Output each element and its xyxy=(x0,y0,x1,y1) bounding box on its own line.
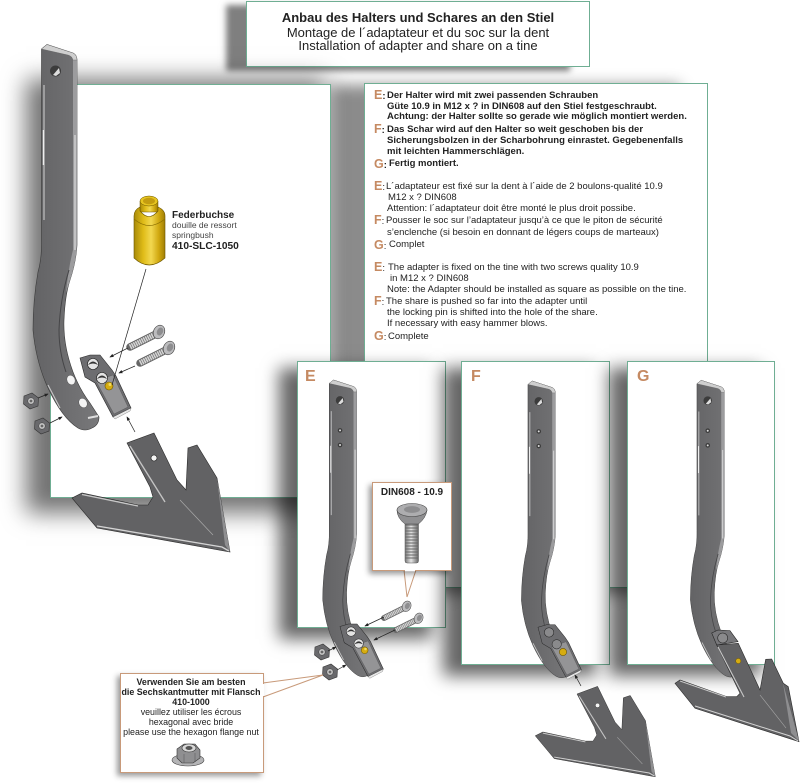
callout text: Verwenden Sie am besten xyxy=(136,677,246,687)
panel: step G xyxy=(627,361,775,665)
callout: flange nut advice xyxy=(120,674,323,772)
label: step E: E xyxy=(305,368,316,385)
instructions in German: Das Schar wird auf den Halter so weit geschoben bis der xyxy=(387,124,643,135)
panel: instructions text background xyxy=(364,83,708,588)
tine xyxy=(33,44,99,430)
bush label: douille de ressort xyxy=(172,220,237,230)
instructions in French: E: xyxy=(374,179,385,193)
title: Anbau des Halters und Schares an den Stiel xyxy=(282,10,554,25)
label: step G: G xyxy=(637,368,649,385)
step F arrow xyxy=(575,675,581,686)
instructions in French: M12 x ? DIN608 xyxy=(388,192,457,203)
callout text: die Sechskantmutter mit Flansch xyxy=(121,687,261,697)
icon: spring bush xyxy=(134,196,165,265)
step G tine xyxy=(690,380,741,677)
panel: step F xyxy=(461,361,610,665)
instructions in French: F: xyxy=(374,213,384,227)
instructions in English: The share is pushed so far into the adapter until xyxy=(386,296,587,307)
instructions in English: F: xyxy=(374,294,384,308)
instructions in English: E: xyxy=(374,260,385,274)
exploded assembly: tine, adapter, share, bolts, nuts xyxy=(24,44,230,552)
step F tine with adapter xyxy=(521,381,581,679)
callout text: hexagonal avec bride xyxy=(149,717,233,727)
instructions in German: Sicherungsbolzen in der Scharbohrung einrastet. Gegebenenfalls xyxy=(387,135,683,146)
step G adapter and share assembled xyxy=(675,630,799,742)
icon: hexagon flange nut xyxy=(172,744,204,766)
instructions in French: L´adaptateur est fixé sur la dent à l´aide de 2 boulons-qualité 10.9 xyxy=(386,181,663,192)
icon: carriage bolt xyxy=(397,504,427,563)
callout heading: DIN608 - 10.9 xyxy=(381,487,444,498)
title xyxy=(282,10,554,53)
label: step F: F xyxy=(471,368,481,385)
share xyxy=(72,433,230,552)
panel: title box xyxy=(246,1,590,67)
instructions in German: Achtung: der Halter sollte so gerade wie möglich montiert werden. xyxy=(387,111,687,122)
instructions in French: G: xyxy=(374,238,386,252)
instructions in French: Pousser le soc sur l’adaptateur jusqu’à ce que le piton de sécurité xyxy=(386,215,663,226)
leader line from bush to pin xyxy=(112,269,146,385)
title: Installation of adapter and share on a tine xyxy=(298,38,538,53)
bush label: Federbuchse xyxy=(172,210,235,221)
instructions in English xyxy=(374,260,686,343)
title: Montage de l´adaptateur et du soc sur la dent xyxy=(287,25,550,40)
instructions in English: G: xyxy=(374,329,386,343)
bush label: 410-SLC-1050 xyxy=(172,241,239,252)
instructions in French: Complet xyxy=(389,239,425,250)
bush label: springbush xyxy=(172,230,214,240)
instructions in German: E: xyxy=(374,88,386,102)
callout: DIN608 bolt xyxy=(372,482,452,597)
callout text: 410-1000 xyxy=(172,697,210,707)
instructions in English: in M12 x ? DIN608 xyxy=(390,273,469,284)
adapter xyxy=(80,355,131,419)
instructions in English: Note: the Adapter should be installed as square as possible on the tine. xyxy=(387,284,686,295)
callout text xyxy=(121,677,261,737)
instructions in German: mit leichten Hammerschlägen. xyxy=(387,146,524,157)
callout text: veuillez utiliser les écrous xyxy=(141,707,242,717)
instructions in French: s’enclenche (si besoin en donnant de légers coups de marteaux) xyxy=(387,227,659,238)
instructions in German: Güte 10.9 in M12 x ? in DIN608 auf den Stiel festgeschraubt. xyxy=(387,101,657,112)
assembly arrows xyxy=(38,348,135,432)
instructions in German: Fertig montiert. xyxy=(389,158,459,169)
instructions in German: G: xyxy=(374,157,387,171)
instructions in German: Der Halter wird mit zwei passenden Schrauben xyxy=(387,90,598,101)
step E tine with adapter xyxy=(323,380,383,678)
instructions in English: The adapter is fixed on the tine with two screws quality 10.9 xyxy=(388,262,639,273)
instructions in German xyxy=(374,88,687,171)
instructions in German: F: xyxy=(374,122,385,136)
instructions in English: If necessary with easy hammer blows. xyxy=(387,318,548,329)
bolts xyxy=(130,323,177,363)
instructions in English: Complete xyxy=(388,331,429,342)
instructions in English: the locking pin is shifted into the hole of the share. xyxy=(387,307,598,318)
nuts xyxy=(24,393,50,434)
callout text: please use the hexagon flange nut xyxy=(123,727,259,737)
step E bolts and nuts xyxy=(314,600,425,680)
instructions in French xyxy=(374,179,663,252)
panel: step E xyxy=(297,361,446,628)
instructions in French: Attention: l´adaptateur doit être monté le plus droit possibe. xyxy=(387,203,636,214)
panel: exploded overview xyxy=(50,84,331,498)
bush label xyxy=(172,210,239,252)
step F share xyxy=(535,686,655,777)
